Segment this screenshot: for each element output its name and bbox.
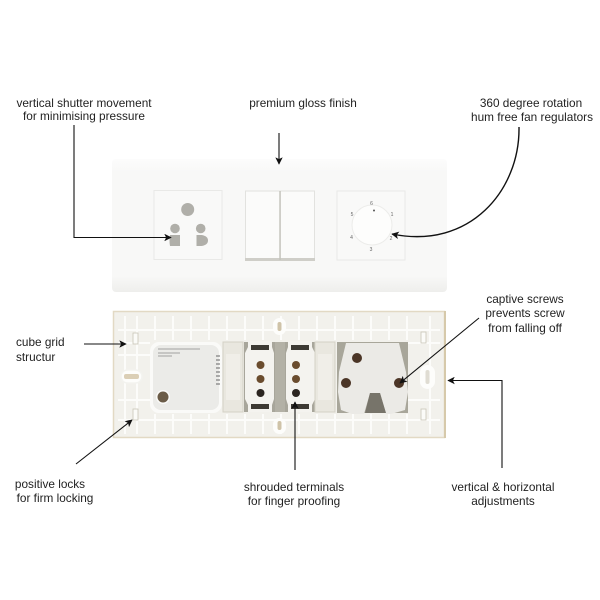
label: vertical shutter movement: vertical shutter movement <box>16 96 152 110</box>
socket module <box>154 190 222 260</box>
label: captive screws: prevents screw <box>485 306 565 320</box>
label: captive screws: captive screws <box>486 292 564 306</box>
arrow: shrouded terminals <box>294 402 296 470</box>
rocker switch module <box>245 191 315 261</box>
label: positive locks: positive locks <box>15 477 85 491</box>
label: positive locks: for firm locking <box>17 491 93 505</box>
label: fan regulators: 360 degree rotation <box>480 96 582 110</box>
positive locks <box>133 332 426 420</box>
arrow: fan regulator <box>392 127 519 237</box>
label: captive screws: from falling off <box>488 321 563 335</box>
label: vertical shutter movement: for minimising pressure <box>23 109 145 123</box>
switch terminals <box>244 341 315 412</box>
arrow: cube grid <box>84 343 126 345</box>
socket module rear <box>337 342 408 414</box>
panel: front switch plate <box>112 159 447 292</box>
label: fan regulators: hum free fan regulators <box>471 110 593 124</box>
arrow: gloss finish <box>278 133 280 164</box>
dial numbers <box>350 201 394 253</box>
dial numbers: 2 <box>390 236 393 242</box>
dial numbers: 4 <box>350 235 353 241</box>
cube grid structure <box>118 316 440 434</box>
label: shrouded terminals: shrouded terminals <box>244 480 344 494</box>
spacer left <box>223 342 243 412</box>
arrow: vertical and horizontal adjustments <box>448 380 502 468</box>
label: shrouded terminals: for finger proofing <box>248 494 340 508</box>
arrow: captive screws <box>400 318 479 383</box>
arrow: positive locks <box>76 420 132 464</box>
spacer right <box>315 342 335 412</box>
mounting slots <box>121 318 435 434</box>
fan regulator module <box>337 191 405 260</box>
label: cube grid structure: structur <box>16 350 55 364</box>
label: adjustments: vertical & horizontal <box>452 480 554 494</box>
panel: rear switch assembly <box>113 311 446 438</box>
label: cube grid structure: cube grid <box>16 335 65 349</box>
dial numbers: 6 <box>370 201 373 207</box>
label: adjustments: adjustments <box>471 494 535 508</box>
arrow: shutter movement <box>74 125 171 238</box>
dial numbers: 1 <box>391 212 394 218</box>
dial numbers: 5 <box>351 212 354 218</box>
label: premium gloss finish: premium gloss finish <box>249 96 357 110</box>
regulator module rear <box>150 342 222 413</box>
dial numbers: 3 <box>370 247 373 253</box>
